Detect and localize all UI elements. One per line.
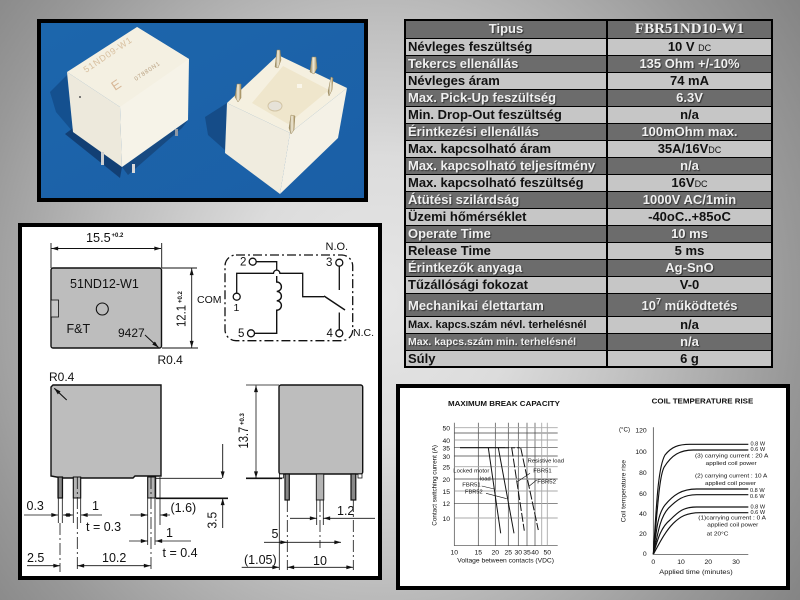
row: contact resistance bbox=[406, 124, 771, 140]
row: nominal current bbox=[406, 73, 771, 89]
chart: coil temperature rise bbox=[619, 398, 769, 576]
side view of relay: 1 bbox=[166, 526, 173, 540]
row: max pick-up bbox=[406, 90, 771, 106]
chart: maximum break capacity: FBR52 bbox=[465, 489, 483, 495]
relay circuit schematic: 4 bbox=[326, 328, 334, 340]
chart: maximum break capacity: 20 bbox=[442, 477, 450, 484]
chart: maximum break capacity: 30 bbox=[442, 454, 450, 461]
chart: coil temperature rise: 0.6 W bbox=[750, 494, 765, 500]
chart: coil temperature rise: 20 bbox=[705, 559, 712, 566]
top view of relay: R0.4 bbox=[158, 353, 183, 367]
chart: coil temperature rise: 100 bbox=[635, 449, 647, 456]
row: mechanical life bbox=[406, 294, 771, 316]
row: flammability: Tűzállósági fokozat bbox=[408, 277, 528, 292]
row: nominal current: 74 mA bbox=[670, 73, 709, 88]
row: release time: 5 ms bbox=[675, 243, 704, 258]
row: contact resistance: 100mOhm max. bbox=[641, 124, 738, 139]
row: min drop-out: n/a bbox=[680, 107, 699, 122]
row: release time bbox=[406, 243, 771, 259]
chart: maximum break capacity: 12 bbox=[442, 501, 450, 508]
chart: coil temperature rise: (°C) bbox=[619, 427, 630, 434]
row: max pick-up: 6.3V bbox=[676, 90, 703, 105]
chart: coil temperature rise: 0.6 W bbox=[750, 447, 766, 453]
row: release time: Release Time bbox=[408, 243, 491, 258]
top view of relay: 15.5 bbox=[86, 231, 111, 245]
relay shadows bbox=[50, 75, 227, 178]
row: dielectric strength bbox=[406, 192, 771, 208]
row: max switching current: 35A/16VDC bbox=[658, 141, 721, 156]
row: nominal voltage: 10 V DC bbox=[668, 39, 711, 54]
relay circuit schematic: 3 bbox=[326, 257, 332, 269]
chart: maximum break capacity: 35 bbox=[523, 550, 531, 556]
row: operate time bbox=[406, 226, 771, 242]
chart: maximum break capacity: FBR52 bbox=[537, 479, 556, 485]
top view of relay: F&T bbox=[66, 322, 90, 336]
chart: coil temperature rise: (3) carrying current : 20 A bbox=[695, 453, 769, 459]
row: contact material: Érintkezők anyaga bbox=[408, 260, 522, 275]
row: max switching current bbox=[406, 141, 771, 157]
chart: coil temperature rise: Coil temperature rise bbox=[620, 459, 628, 522]
front view of relay: 1.2 bbox=[337, 504, 354, 518]
table header row: FBR51ND10-W1 bbox=[635, 21, 744, 37]
chart: maximum break capacity: Voltage between contacts (VDC) bbox=[457, 557, 554, 564]
front view of relay: +0.3 bbox=[240, 412, 246, 425]
row: contact material: Ag-SnO bbox=[665, 260, 714, 275]
chart: coil temperature rise: (2) carrying current : 10 A bbox=[695, 474, 768, 480]
relay circuit schematic: 5 bbox=[238, 328, 244, 340]
chart: maximum break capacity: 15 bbox=[475, 550, 482, 556]
row: mechanical life: Mechanikai élettartam bbox=[408, 298, 544, 313]
chart: maximum break capacity: 10 bbox=[451, 550, 458, 556]
side view of relay: t = 0.4 bbox=[162, 546, 198, 560]
row: nominal voltage: Névleges feszültség bbox=[408, 39, 532, 54]
row: dielectric strength: 1000V AC/1min bbox=[643, 192, 736, 207]
side view of relay: 2.5 bbox=[27, 551, 44, 565]
chart: maximum break capacity: 15 bbox=[442, 489, 450, 496]
row: max pick-up: Max. Pick-Up feszültség bbox=[408, 90, 556, 105]
chart: coil temperature rise: (1)carrying current : 0 A bbox=[698, 515, 766, 521]
row: min drop-out: Min. Drop-Out feszültség bbox=[408, 107, 562, 122]
row: cycles at nominal load bbox=[406, 317, 771, 333]
side view of relay bbox=[24, 370, 228, 572]
front view of relay: 10 bbox=[313, 554, 327, 568]
chart: coil temperature rise: 20 bbox=[639, 531, 647, 538]
relay pins bbox=[235, 50, 333, 134]
row: flammability bbox=[406, 277, 771, 293]
row: max switching voltage bbox=[406, 175, 771, 191]
chart: maximum break capacity: FBR51 bbox=[462, 483, 481, 489]
side view of relay: (1.6) bbox=[170, 501, 196, 515]
relay circuit schematic bbox=[197, 241, 374, 341]
side view of relay: 3.5 bbox=[206, 512, 220, 528]
chart: coil temperature rise: COIL TEMPERATURE RISE bbox=[652, 398, 754, 405]
chart: maximum break capacity: 30 bbox=[515, 550, 522, 556]
row: weight: Súly bbox=[408, 351, 435, 366]
chart: coil temperature rise: 0.8 W bbox=[750, 442, 766, 448]
top view of relay bbox=[51, 231, 198, 367]
chart: maximum break capacity: 20 bbox=[492, 550, 499, 556]
chart: coil temperature rise: 10 bbox=[677, 559, 685, 566]
row: operating temperature bbox=[406, 209, 771, 225]
row: nominal current: Névleges áram bbox=[408, 73, 500, 88]
row: max switching power: Max. kapcsolható teljesítmény bbox=[408, 158, 595, 173]
panel: specification table bbox=[404, 19, 773, 368]
relay circuit schematic: 2 bbox=[240, 256, 246, 268]
chart: maximum break capacity: 35 bbox=[442, 446, 450, 452]
chart: maximum break capacity: Resistive load bbox=[528, 458, 564, 464]
row: min drop-out bbox=[406, 107, 771, 123]
chart: coil temperature rise: 0.8 W bbox=[750, 504, 766, 510]
front view of relay: 13.7 bbox=[236, 427, 251, 448]
row: mechanical life: 107 működtetés bbox=[641, 297, 738, 313]
top view of relay: +0.2 bbox=[112, 233, 124, 239]
chart: maximum break capacity: 50 bbox=[442, 426, 450, 432]
row: max switching power: n/a bbox=[680, 158, 699, 173]
row: weight: 6 g bbox=[680, 351, 699, 366]
chart: coil temperature rise: applied coil power bbox=[706, 461, 757, 467]
chart: maximum break capacity: 50 bbox=[544, 550, 551, 556]
chart: maximum break capacity: 40 bbox=[442, 438, 450, 445]
chart: maximum break capacity: Contact switching current (A) bbox=[432, 445, 438, 526]
row: flammability: V-0 bbox=[680, 277, 699, 292]
relay circuit schematic: 1 bbox=[234, 302, 240, 314]
row: coil resistance bbox=[406, 56, 771, 72]
chart: coil temperature rise: applied coil power bbox=[707, 523, 758, 529]
row: cycles at minimum load bbox=[406, 334, 771, 350]
chart: maximum break capacity: MAXIMUM BREAK CAPACITY bbox=[448, 401, 560, 408]
row: contact resistance: Érintkezési ellenállás bbox=[408, 124, 539, 139]
row: cycles at nominal load: Max. kapcs.szám névl. terhelésnél bbox=[408, 319, 587, 331]
chart: coil temperature rise: 0.8 W bbox=[750, 488, 765, 494]
top view of relay: 12.1 bbox=[174, 305, 188, 327]
chart: maximum break capacity: 25 bbox=[505, 550, 512, 556]
row: weight bbox=[406, 351, 771, 366]
row: nominal voltage bbox=[406, 39, 771, 55]
side view of relay: t = 0.3 bbox=[86, 520, 121, 534]
chart: coil temperature rise: 80 bbox=[639, 470, 647, 477]
relay left: body: 07880N1 bbox=[134, 61, 162, 83]
chart: coil temperature rise: applied coil power bbox=[705, 481, 756, 487]
chart: maximum break capacity: load bbox=[480, 477, 491, 483]
marking text on relay: 51ND09-W1 bbox=[82, 35, 134, 75]
row: max switching current: Max. kapcsolható áram bbox=[408, 141, 551, 156]
relay circuit schematic: N.C. bbox=[353, 327, 374, 339]
row: coil resistance: Tekercs ellenállás bbox=[408, 56, 518, 71]
chart: coil temperature rise: 120 bbox=[635, 428, 647, 434]
chart: coil temperature rise: 40 bbox=[639, 511, 647, 518]
top view of relay: +0.2 bbox=[178, 290, 184, 303]
top view of relay: 9427 bbox=[118, 326, 145, 340]
row: operate time: 10 ms bbox=[671, 226, 708, 241]
row: operating temperature: Üzemi hőmérséklet bbox=[408, 209, 526, 224]
row: coil resistance: 135 Ohm +/-10% bbox=[639, 56, 740, 71]
side view of relay: R0.4 bbox=[49, 370, 75, 384]
front view of relay: 5 bbox=[272, 527, 278, 541]
row: max switching power bbox=[406, 158, 771, 174]
top view of relay: 51ND12-W1 bbox=[70, 277, 139, 291]
relay circuit schematic: COM bbox=[197, 294, 222, 306]
row: dielectric strength: Átütési szilárdság bbox=[408, 192, 519, 207]
row: cycles at nominal load: n/a bbox=[680, 317, 699, 332]
chart: coil temperature rise: 0 bbox=[643, 551, 647, 558]
relay left: body: E bbox=[108, 76, 124, 93]
table header row bbox=[406, 21, 771, 38]
side view of relay: 1 bbox=[92, 499, 99, 513]
row: max switching voltage: Max. kapcsolható feszültség bbox=[408, 175, 584, 190]
chart: maximum break capacity: 10 bbox=[442, 516, 450, 523]
row: cycles at minimum load: Max. kapcs.szám min. terhelésnél bbox=[408, 336, 576, 348]
front view of relay bbox=[236, 385, 375, 570]
chart: coil temperature rise: Applied time (minutes) bbox=[659, 569, 733, 576]
row: max switching voltage: 16VDC bbox=[671, 175, 708, 190]
chart: maximum break capacity: 25 bbox=[442, 464, 450, 472]
chart: coil temperature rise: 0 bbox=[651, 559, 655, 566]
table header row: Tipus bbox=[489, 21, 523, 36]
chart: maximum break capacity bbox=[432, 401, 564, 564]
relay left: body bbox=[67, 27, 189, 173]
chart: coil temperature rise: 60 bbox=[639, 491, 647, 498]
chart: coil temperature rise: 30 bbox=[732, 559, 740, 566]
chart: maximum break capacity: Locked motor bbox=[453, 469, 489, 475]
row: contact material bbox=[406, 260, 771, 276]
side view of relay: 0.3 bbox=[26, 499, 44, 513]
side view of relay: 10.2 bbox=[102, 551, 126, 565]
row: cycles at minimum load: n/a bbox=[680, 334, 699, 349]
relay right: body bbox=[225, 50, 347, 194]
relay circuit schematic: N.O. bbox=[326, 241, 348, 253]
chart: coil temperature rise: 0.6 W bbox=[750, 510, 766, 516]
chart: coil temperature rise: at 20°C bbox=[707, 532, 728, 538]
chart: maximum break capacity: 40 bbox=[531, 550, 539, 556]
row: operate time: Operate Time bbox=[408, 226, 491, 241]
row: operating temperature: -40oC..+85oC bbox=[648, 209, 731, 224]
front view of relay: (1.05) bbox=[244, 553, 277, 567]
chart: maximum break capacity: FBR51 bbox=[533, 469, 552, 475]
